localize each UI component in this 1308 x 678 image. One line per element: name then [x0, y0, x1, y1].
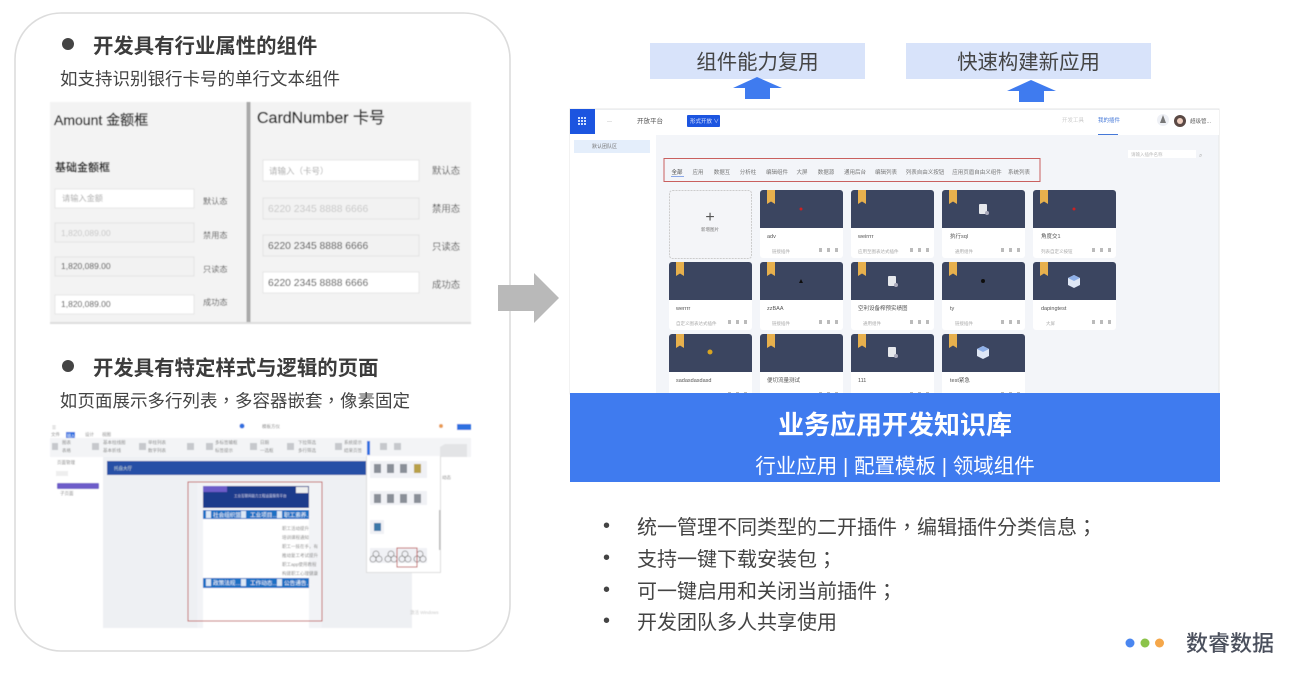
label: reuse: 组件能力复用 [696, 51, 819, 74]
screenshot: amount and card number inputs: 6220 2345 8888 6666 [268, 241, 368, 252]
banner: knowledge base [570, 393, 1220, 482]
screenshot: page designer: 构建职工心理健康 [282, 570, 318, 577]
screenshot: page designer: 托盘大厅 [114, 465, 132, 472]
screenshot: amount and card number inputs: 请输入（卡号） [269, 166, 329, 176]
screenshot: page designer: 推动复工考试提升 [282, 552, 318, 559]
screenshot: amount and card number inputs: 默认态 [432, 165, 460, 176]
screenshot: page designer: 模板方仪 [262, 423, 280, 430]
screenshot: plugin platform: 请输入插件名称 [1131, 151, 1163, 158]
screenshot: page designer: 文件 [51, 431, 60, 438]
logo: brand [1126, 631, 1274, 656]
screenshot: plugin platform: weirrrr [857, 234, 874, 240]
screenshot: plugin platform: 列表自定义按钮 [1041, 248, 1073, 255]
screenshot: plugin platform: 列表自由义按钮 [906, 168, 945, 176]
screenshot: plugin platform: 开发工具 [1062, 116, 1085, 124]
bullet list: 可一键启用和关闭当前插件； [637, 580, 897, 603]
arrow: left to right [498, 273, 559, 323]
screenshot: amount and card number inputs: 基础金额框 [55, 160, 110, 174]
bullet list: • [603, 579, 610, 601]
bullet list: • [603, 547, 610, 569]
screenshot: amount and card number inputs [50, 102, 471, 324]
label: fast build [906, 43, 1151, 79]
screenshot: amount and card number inputs: Amount 金额框 [54, 112, 148, 128]
screenshot: plugin platform: 链接插件 [772, 248, 790, 255]
screenshot: plugin platform: 编辑列表 [875, 168, 897, 176]
screenshot: page designer: 工业互联网能力工程运营服务平台 [234, 493, 287, 498]
screenshot: plugin platform: 全部 [671, 168, 683, 176]
screenshot: plugin platform: 应用页眉自由义组件 [952, 168, 1002, 176]
screenshot: page designer: 社会组织篮 [213, 511, 241, 519]
screenshot: page designer [50, 422, 471, 628]
screenshot: plugin platform: 角度交1 [1041, 232, 1061, 240]
screenshot: plugin platform: sadasdasdasd [676, 378, 711, 384]
screenshot: plugin platform: 数据互 [714, 168, 731, 176]
screenshot: plugin platform: 执行sql [950, 232, 968, 240]
screenshot: plugin platform: dapingtest [1041, 306, 1067, 312]
screenshot: amount and card number inputs: 1,820,089.00 [61, 261, 111, 271]
screenshot: plugin platform: werrrr [675, 306, 691, 312]
screenshot: page designer: 培训课程通知 [282, 534, 309, 541]
screenshot: plugin platform [570, 109, 1219, 402]
screenshot: plugin platform: 新增图片 [701, 226, 719, 233]
screenshot: plugin platform: 通用组件 [955, 248, 973, 255]
label: fast build: 快速构建新应用 [957, 51, 1100, 74]
screenshot: amount and card number inputs: 6220 2345 8888 6666 [268, 204, 368, 215]
screenshot: amount and card number inputs: 禁用态 [432, 203, 460, 214]
screenshot: plugin platform: 超级管... [1190, 117, 1212, 125]
screenshot: page designer: 页面管理 [57, 459, 75, 466]
screenshot: plugin platform: — [607, 119, 612, 125]
screenshot: plugin platform: 数据源 [818, 168, 835, 176]
screenshot: plugin platform: 自定义图表达式插件 [676, 320, 717, 327]
screenshot: amount and card number inputs: 禁用态 [203, 230, 228, 240]
screenshot: page designer: 结果页签 [344, 447, 362, 454]
screenshot: page designer: 视图 [102, 431, 111, 438]
screenshot: plugin platform: 分析柱 [740, 168, 757, 176]
screenshot: plugin platform: + [705, 209, 715, 226]
screenshot: page designer: 职工app使用教程 [282, 561, 317, 568]
screenshot: page designer: 单柱列表 [148, 439, 166, 446]
screenshot: page designer: 职工素养… [284, 511, 312, 519]
screenshot: page designer: 子页面 [60, 490, 74, 497]
screenshot: page designer: 公告通告… [284, 579, 312, 587]
screenshot: page designer: ☰ [52, 425, 57, 430]
bullet list: 开发团队多人共享使用 [637, 611, 837, 634]
screenshot: plugin platform: 通用组件 [863, 320, 881, 327]
screenshot: plugin platform: 系统列表 [1008, 168, 1030, 176]
screenshot: page designer: 日期 [260, 440, 269, 446]
screenshot: amount and card number inputs: 只读态 [203, 264, 228, 274]
screenshot: plugin platform: ty [950, 306, 955, 312]
text block: industry components description: 如支持识别银行卡号的单行文本组件 [60, 69, 340, 89]
screenshot: plugin platform: 我的插件 [1098, 116, 1121, 124]
screenshot: page designer: 动态 [442, 474, 451, 481]
screenshot: amount and card number inputs: 成功态 [432, 279, 460, 290]
screenshot: page designer: 基础 [420, 474, 429, 481]
screenshot: amount and card number inputs: 6220 2345 8888 6666 [268, 278, 368, 289]
banner: knowledge base: 业务应用开发知识库 [778, 410, 1012, 440]
screenshot: page designer: 数字列表 [148, 447, 166, 454]
screenshot: page designer: 插入 [67, 432, 75, 438]
screenshot: page designer: 基本柱线图 [103, 439, 126, 446]
bullet list: • [603, 610, 610, 632]
bullet list: 支持一键下载安装包； [637, 548, 837, 571]
screenshot: plugin platform: 大屏 [1046, 320, 1055, 327]
bullet list: • [603, 515, 610, 537]
heading: styled pages: 开发具有特定样式与逻辑的页面 [93, 356, 378, 380]
screenshot: page designer: 表格 [62, 447, 71, 454]
screenshot: page designer: 多标签输框 [215, 439, 238, 446]
screenshot: page designer: 激活 Windows [410, 609, 439, 616]
screenshot: page designer: 职工一技在手，有 [282, 543, 318, 550]
screenshot: amount and card number inputs: 1,820,089.00 [61, 299, 111, 309]
screenshot: plugin platform: adv [767, 234, 776, 240]
screenshot: plugin platform: 链接插件 [955, 320, 973, 327]
screenshot: plugin platform: 默认团队区 [592, 143, 617, 150]
screenshot: plugin platform: ⌕ [1199, 153, 1202, 159]
bullet list [603, 515, 1097, 634]
screenshot: page designer: 标签提示 [215, 447, 233, 454]
screenshot: amount and card number inputs: 成功态 [203, 297, 228, 307]
screenshot: amount and card number inputs: 1,820,089.00 [61, 228, 111, 238]
screenshot: page designer: 职工活动提升 [282, 525, 309, 532]
bullet list: 统一管理不同类型的二开插件，编辑插件分类信息； [637, 516, 1097, 539]
screenshot: plugin platform: 通用后台 [844, 168, 866, 176]
screenshot: page designer: 一选框 [260, 447, 274, 454]
screenshot: plugin platform: 链接插件 [772, 320, 790, 327]
screenshot: amount and card number inputs: 请输入金额 [62, 193, 103, 203]
screenshot: plugin platform: 111 [858, 378, 866, 384]
label: reuse [650, 43, 865, 79]
screenshot: amount and card number inputs: 只读态 [432, 241, 460, 252]
screenshot: plugin platform: 开放平台 [637, 116, 663, 125]
screenshot: page designer: 政策法规… [213, 579, 241, 587]
screenshot: amount and card number inputs: 默认态 [203, 196, 228, 206]
screenshot: plugin platform: 应用至图表达式插件 [858, 248, 899, 255]
screenshot: plugin platform: 应用 [692, 168, 704, 176]
screenshot: page designer: 多行筛选 [298, 447, 316, 454]
screenshot: page designer: 设计 [85, 431, 94, 438]
text block: styled pages description: 如页面展示多行列表，多容器嵌套，像素固定 [60, 391, 410, 411]
screenshot: amount and card number inputs: CardNumber 卡号 [257, 109, 385, 127]
screenshot: page designer: 工作动态… [250, 579, 278, 587]
heading: industry components: 开发具有行业属性的组件 [93, 35, 317, 58]
icon: up arrow 2 [1007, 80, 1056, 102]
screenshot: plugin platform: 空利设备榨预实绩图 [858, 304, 908, 312]
screenshot: page designer: 基本折线 [103, 447, 121, 454]
screenshot: plugin platform: 形式开放 ∨ [690, 117, 719, 125]
screenshot: plugin platform: test紧急 [950, 376, 970, 384]
screenshot: page designer: 系统提示 [344, 439, 362, 446]
panel: left rounded panel [15, 13, 510, 651]
logo: brand: 数睿数据 [1186, 631, 1274, 656]
screenshot: plugin platform: 大屏 [796, 168, 808, 176]
banner: knowledge base: 行业应用 | 配置模板 | 领域组件 [755, 455, 1035, 478]
screenshot: page designer: 图表 [62, 439, 71, 446]
screenshot: page designer: 工业项目… [250, 511, 278, 519]
icon: up arrow 1 [733, 77, 782, 99]
screenshot: plugin platform: zzBAA [767, 306, 784, 312]
screenshot: page designer: 下拉筛选 [298, 439, 316, 446]
screenshot: plugin platform: 编辑组件 [766, 168, 788, 176]
screenshot: plugin platform: 便切流量测试 [767, 376, 801, 384]
